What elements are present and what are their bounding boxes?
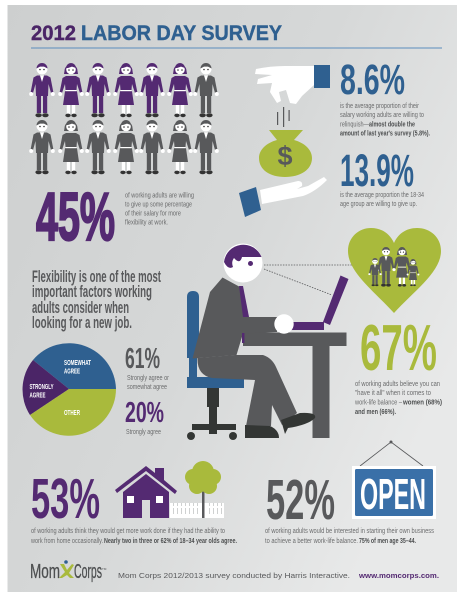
illustration: seated man (192, 244, 315, 438)
pie chart: OTHER (64, 410, 80, 417)
text: 13.9% description: age group are willing to give up. (340, 199, 417, 208)
icon: office chair (187, 291, 244, 440)
text: 8.6% description: is the average proportion of their (340, 101, 419, 110)
text: 53% description (30, 526, 237, 545)
illustration: desk (243, 332, 346, 438)
icon: heart with family (348, 228, 441, 313)
title: LABOR DAY SURVEY (81, 22, 282, 45)
text: 67% description: and men (66%). (355, 407, 396, 416)
logo: Mom Corps (30, 560, 107, 583)
footer website: www.momcorps.com. (358, 571, 439, 580)
pie chart: AGREE (30, 392, 46, 400)
text: 13.9% description: is the average proportion the 18-34 (340, 190, 424, 199)
text: 45% description: of their salary for more (125, 208, 181, 218)
text: 8.6% description: relinquish— (340, 120, 369, 128)
jacket (192, 278, 277, 358)
text: 53% description: work from home occasionally. (30, 536, 103, 545)
eye (248, 261, 253, 266)
stat: 13.9%: 13.9% (340, 145, 414, 196)
stat: 61% (125, 343, 169, 391)
stat: 61%: Strongly agree or (127, 373, 169, 382)
text: 8.6% description: salary working adults are willing to (340, 110, 424, 119)
text: 53% description: of working adults think they would get more work done if they had the ability to (31, 526, 225, 535)
text: 45% description (125, 190, 194, 226)
stat: 61%: 61% (125, 343, 160, 375)
icon: money bag: $ (277, 141, 293, 171)
back shoe (281, 413, 315, 434)
icon: open sign (352, 440, 436, 519)
front shoe (245, 425, 279, 438)
stat: 52%: 52% (266, 468, 335, 532)
icon: receiving hand (239, 177, 327, 217)
stat: 8.6%: 8.6% (340, 56, 405, 104)
text: 52% description: 75% of men age 35–44. (359, 536, 416, 545)
text: 8.6% description (340, 101, 430, 138)
text: 52% description: to achieve a better work-life balance. (265, 536, 358, 545)
text: 13.9% description (340, 190, 424, 208)
head (224, 244, 262, 282)
pie chart: SOMEWHAT (64, 360, 91, 367)
stat: 45%: 45% (36, 179, 115, 255)
logo: Mom Corps: Mom (30, 561, 60, 583)
text: 67% description: women (68%) (402, 398, 442, 406)
text: 45% description: of working adults are willing (125, 190, 194, 200)
pie chart: AGREE (64, 368, 80, 376)
heading: flexibility (32, 268, 161, 332)
hair (224, 245, 262, 268)
icon: house, fence and tree (115, 461, 224, 518)
text: 8.6% description: almost double the (369, 120, 415, 128)
heading: flexibility: adults consider when (32, 299, 129, 317)
logo: Mom Corps: Corps (74, 561, 102, 583)
footer credit: Mom Corps 2012/2013 survey conducted by Harris Interactive. (118, 571, 350, 580)
stat: 20%: Strongly agree (126, 427, 161, 436)
stat: 53%: 53% (31, 467, 100, 531)
stat: 20% (125, 397, 164, 436)
hand (274, 314, 294, 334)
heading: flexibility: looking for a new job. (32, 314, 132, 332)
tie (239, 286, 249, 317)
text: 52% description (265, 526, 434, 545)
people pictogram: 45 percent highlighted (29, 63, 219, 174)
text: 67% description: work-life balance – (354, 398, 403, 406)
title: 2012 (31, 22, 76, 45)
heading: flexibility: Flexibility is one of the most (32, 268, 161, 286)
text: 67% description (354, 379, 442, 416)
text: 53% description: Nearly two in three or 62% of 18–34 year olds agree. (104, 536, 237, 545)
legs (197, 355, 297, 426)
icon: falling lines (277, 107, 290, 127)
dotted sight lines (264, 265, 365, 295)
stat: 20%: 20% (125, 397, 164, 429)
text: 67% description: of working adults believe you can (355, 379, 440, 388)
heading: flexibility: important factors working (32, 283, 152, 301)
illustration: laptop (291, 276, 348, 330)
icon: money bag (259, 130, 312, 177)
text: 45% description: to give up some percentage (125, 200, 192, 208)
text: 67% description: "have it all" when it comes to (355, 388, 431, 397)
icon: hand dropping money (255, 65, 330, 104)
stat: 61%: somewhat agree (127, 382, 167, 391)
logo: Mom Corps: TM (102, 567, 107, 571)
pie chart: STRONGLY (30, 384, 54, 391)
pie chart (23, 343, 116, 436)
text: 45% description: flexibility at work. (125, 218, 168, 226)
